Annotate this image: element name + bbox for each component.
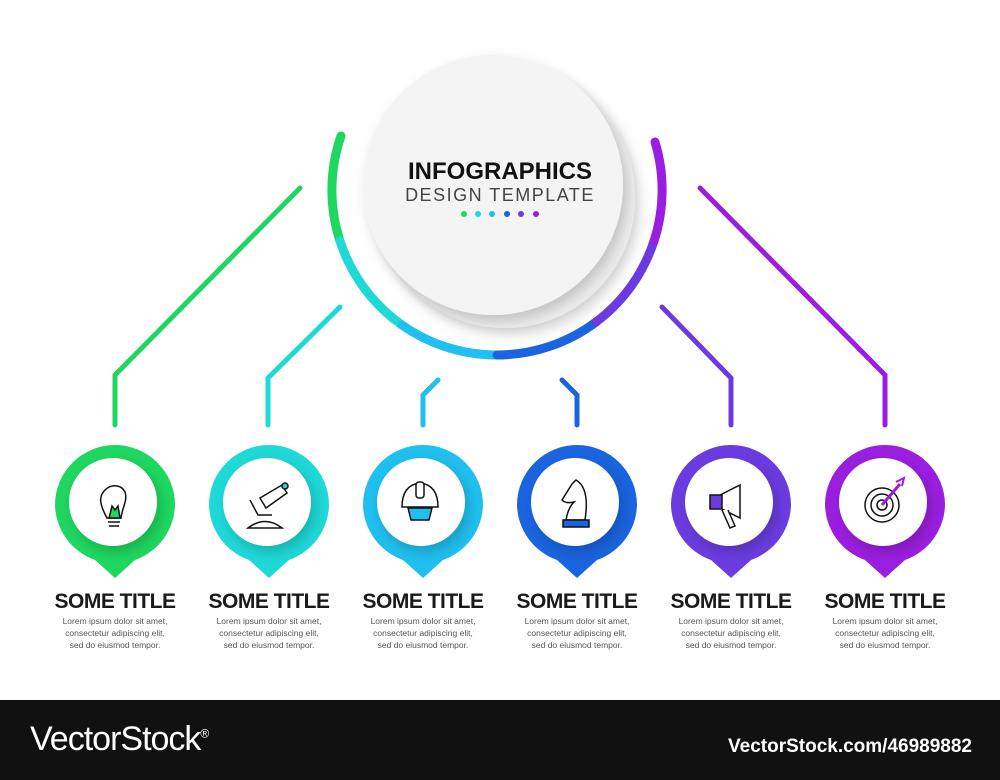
center circle: INFOGRAPHICS [408,158,592,185]
text 4: Lorem ipsum dolor sit amet, [525,616,629,626]
text 1: Lorem ipsum dolor sit amet, [63,616,167,626]
text 5: Lorem ipsum dolor sit amet, [679,616,783,626]
text 5: consectetur adipiscing elit, [681,628,781,638]
ring arc [332,136,662,355]
text 1: consectetur adipiscing elit, [65,628,165,638]
text 4 [516,590,638,650]
center circle [363,55,635,328]
text 6 [824,590,946,650]
text 4: sed do eiusmod tempor. [532,640,622,650]
text 5: sed do eiusmod tempor. [686,640,776,650]
text 3 [362,590,484,650]
text 1 [54,590,176,650]
connector lines [115,188,885,425]
pin 4: knight [517,445,637,578]
footer logo: VectorStock® [30,720,208,758]
pin 1: bulb [55,445,175,578]
text 4: SOME TITLE [516,590,638,613]
text 3: SOME TITLE [362,590,484,613]
text 6: Lorem ipsum dolor sit amet, [833,616,937,626]
text 6: sed do eiusmod tempor. [840,640,930,650]
text 4: consectetur adipiscing elit, [527,628,627,638]
text 5 [670,590,792,650]
pin 2: microscope [209,445,329,578]
text 6: SOME TITLE [824,590,946,613]
text 3: Lorem ipsum dolor sit amet, [371,616,475,626]
text 1: sed do eiusmod tempor. [70,640,160,650]
text 3: sed do eiusmod tempor. [378,640,468,650]
pin 6: target [825,445,945,578]
text 2: sed do eiusmod tempor. [224,640,314,650]
footer bar [0,700,1000,780]
text 2: SOME TITLE [208,590,330,613]
center circle: DESIGN TEMPLATE [405,185,595,205]
text 2: Lorem ipsum dolor sit amet, [217,616,321,626]
pin 3: helmet gear [363,445,483,578]
pin 5: megaphone [671,445,791,578]
text 1: SOME TITLE [54,590,176,613]
footer url: VectorStock.com/46989882 [728,736,972,757]
text 3: consectetur adipiscing elit, [373,628,473,638]
text 6: consectetur adipiscing elit, [835,628,935,638]
text 5: SOME TITLE [670,590,792,613]
text 2: consectetur adipiscing elit, [219,628,319,638]
text 2 [208,590,330,650]
